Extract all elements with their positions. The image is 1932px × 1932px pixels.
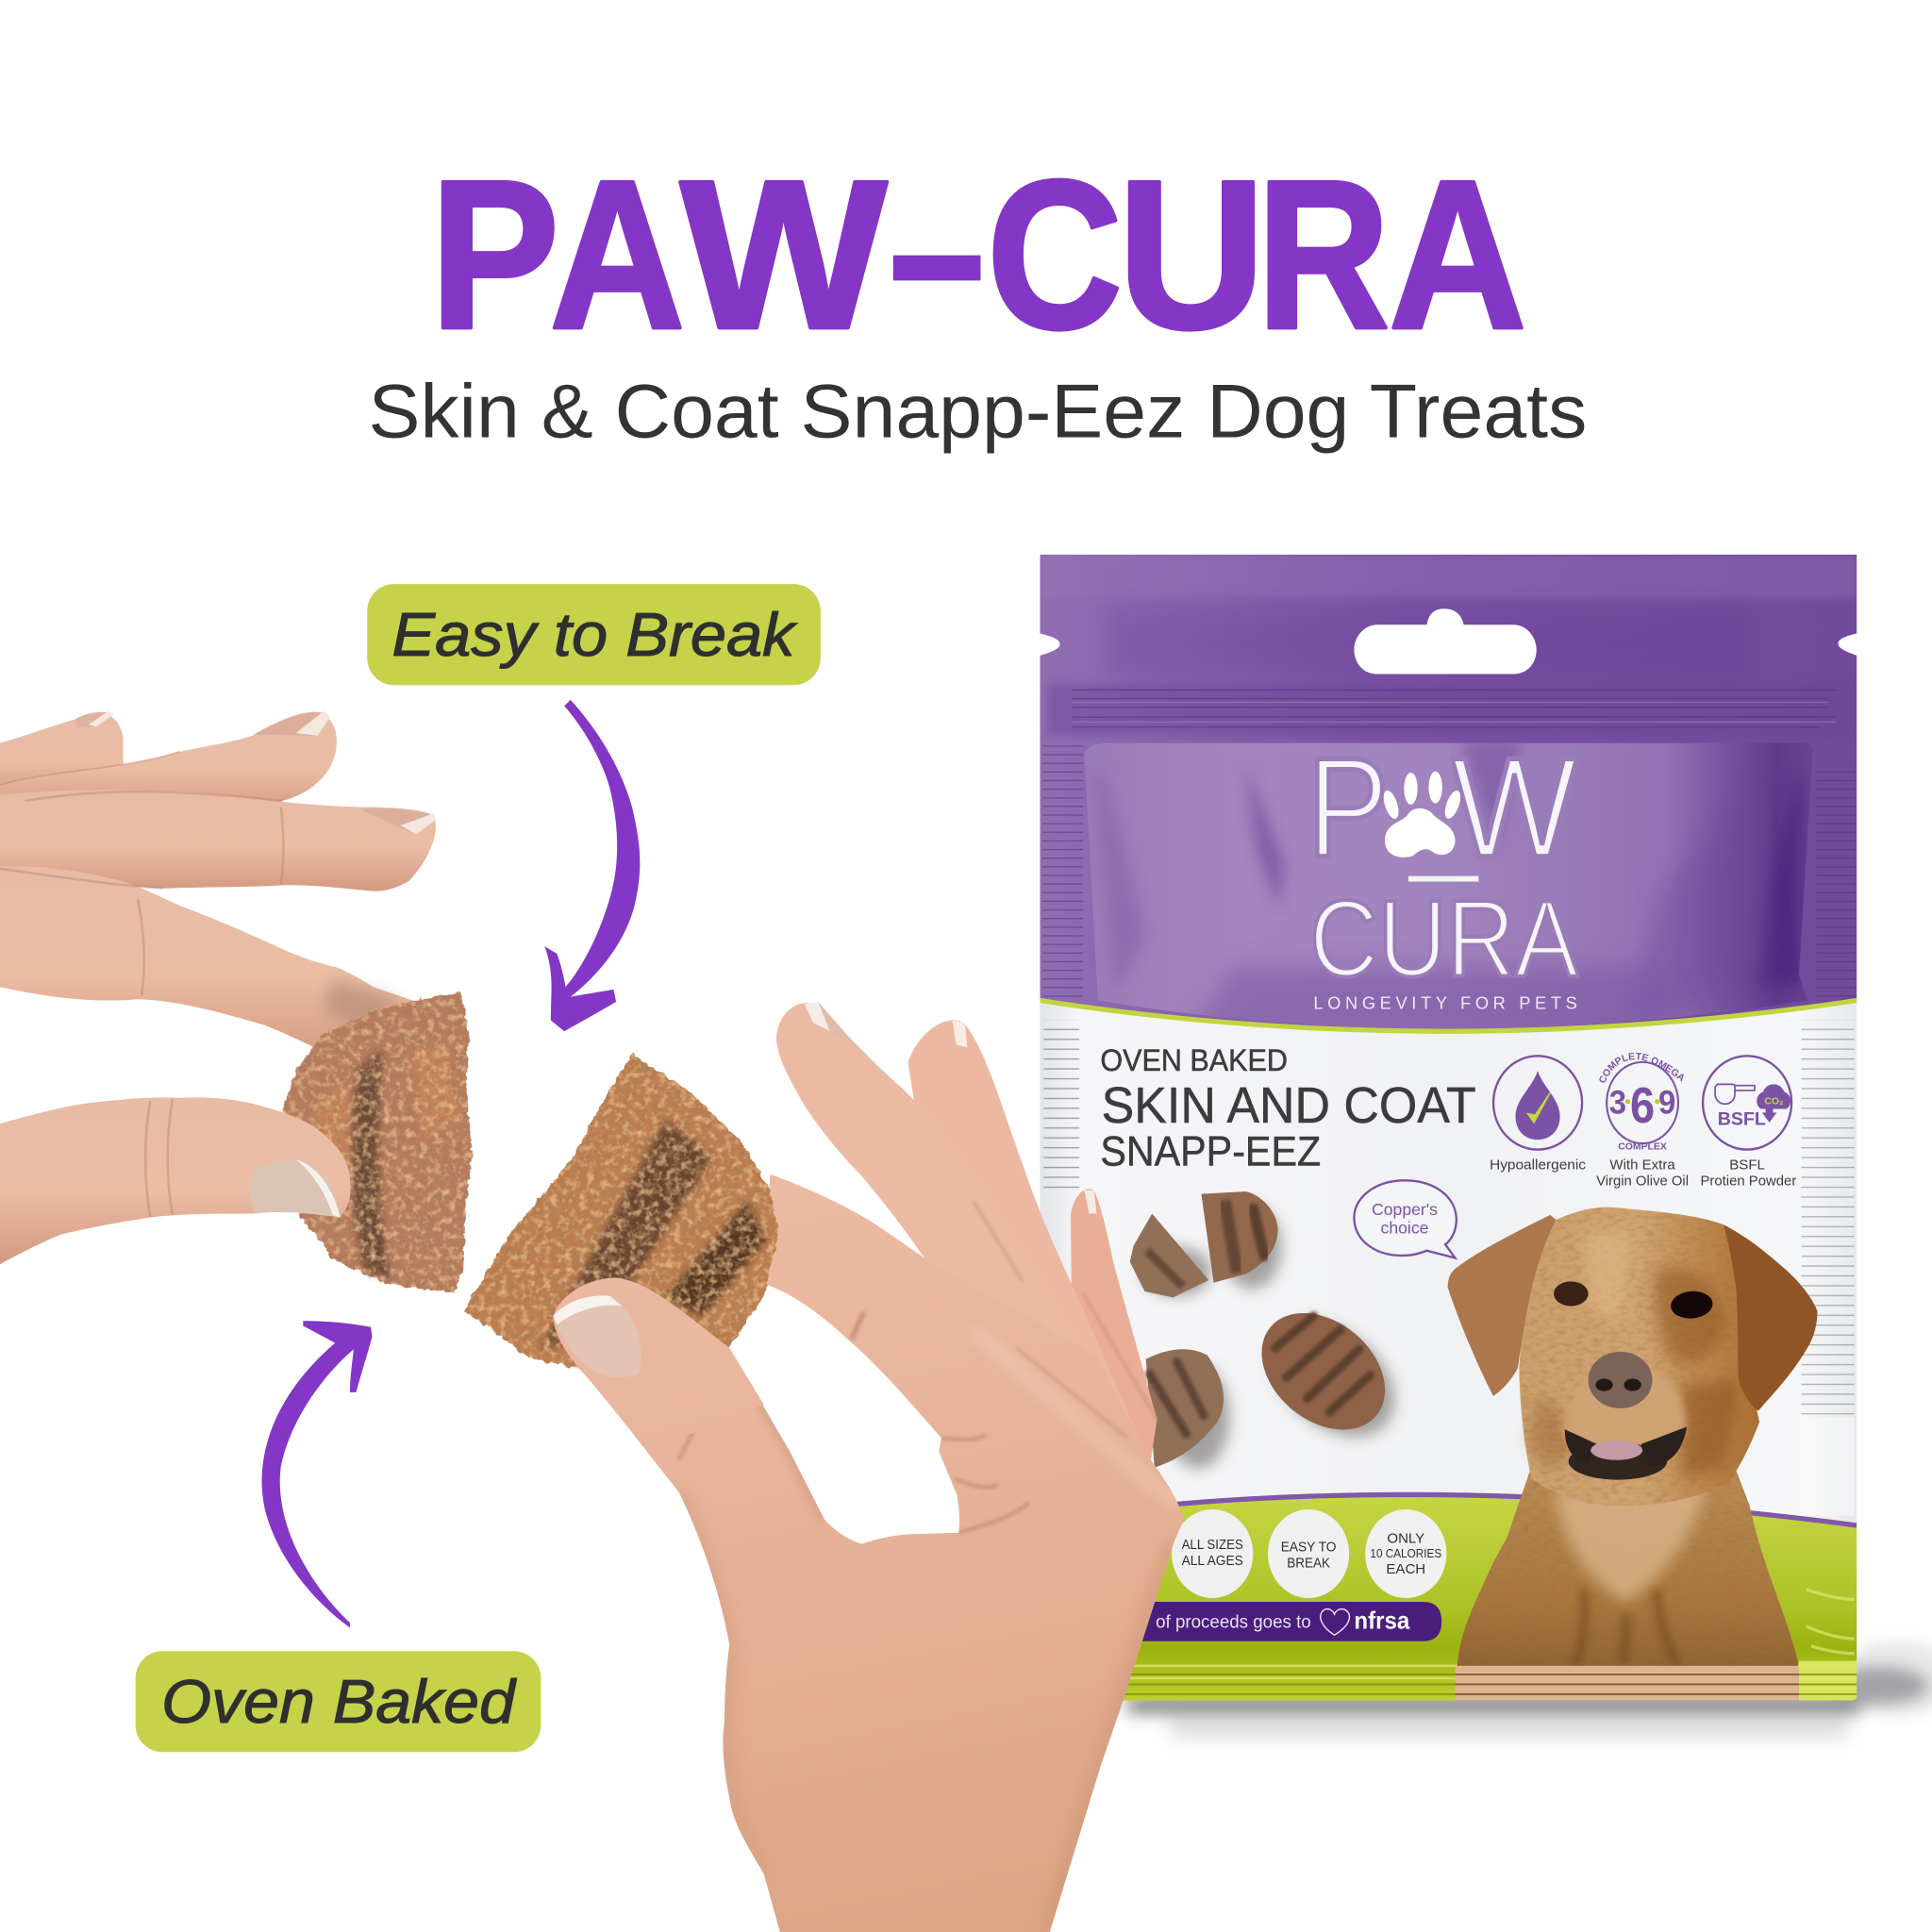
broken treat: left half [282,991,472,1292]
donation banner: nfrsa [1354,1607,1410,1635]
side foil creases [1042,745,1083,998]
icon: omega 3-6-9: COMPLETE OMEGA [1599,1053,1684,1083]
pouch shadow [1127,1641,1932,1740]
icon captions: Hypoallergenic [1490,1158,1586,1174]
product name: SKIN AND COAT [1102,1078,1476,1134]
finger nail tips [805,1002,1096,1214]
first finger [776,1003,1109,1454]
finger shading [0,752,283,995]
arrow: up to treat [262,1321,372,1627]
logo: PAW: W [1452,728,1577,887]
icon: omega 3-6-9: 3 [1609,1085,1626,1122]
dog nose [1589,1352,1653,1429]
logo: CURA: CURA [1309,878,1578,999]
title: - [880,131,994,368]
broken treat left [1130,1214,1208,1297]
left thumb [0,1097,351,1264]
benefit badges: ALL SIZES [1182,1537,1243,1553]
title: P [430,136,559,373]
dog eyes [1554,1281,1714,1320]
right hand [553,1002,1184,1932]
title: R [1257,136,1390,373]
groove [352,1047,390,1277]
icon: BSFL powder [1703,1056,1791,1150]
benefit badges: ALL AGES [1182,1553,1243,1569]
callout: Easy to Break: Easy to Break [391,600,798,669]
dog body [1456,1454,1799,1700]
whole treat [1239,1290,1407,1454]
back finger [1071,1189,1157,1460]
treat shadows [1142,1205,1416,1469]
index finger [0,866,413,1059]
zip seal [1047,684,1848,736]
title: A [1389,136,1526,373]
subtitle: Skin & Coat Snapp-Eez Dog Treats [369,370,1587,455]
icon: omega 3-6-9: 6 [1630,1078,1655,1134]
title: A [550,136,685,373]
dog head [1519,1208,1759,1507]
product name: SNAPP-EEZ [1100,1129,1321,1175]
benefit badges: ONLY [1387,1530,1424,1546]
middle finger [0,790,436,891]
title: C [987,136,1123,373]
treat body [463,1054,778,1374]
title [430,131,1526,373]
callout: Copper's choice: Copper's [1372,1200,1438,1219]
hang hole [1354,608,1537,674]
thumb nail [250,1160,340,1217]
icon: hypoallergenic drop [1493,1056,1582,1150]
icon: omega 3-6-9: COMPLEX [1618,1142,1667,1153]
benefit badges: 10 CALORIES [1370,1546,1441,1560]
icon: paw print [1381,772,1463,858]
white side creases [1043,1020,1079,1192]
thumb over treat [553,1277,764,1441]
dog face shading [1528,1232,1740,1478]
icon: omega 3-6-9: 9 [1658,1085,1675,1122]
callout: Oven Baked [136,1651,541,1752]
icon: omega 3-6-9 [1599,1053,1684,1153]
dog chest [1555,1485,1707,1602]
arrow: down to treat [544,700,640,1031]
benefit badges: EACH [1386,1561,1425,1577]
icon captions: With Extra [1609,1158,1675,1174]
donation banner [1109,1602,1441,1641]
product name: OVEN BAKED [1100,1043,1288,1077]
icon captions [1490,1158,1796,1189]
fingernail tips [76,711,436,834]
half treat [1146,1349,1224,1468]
finger boundaries [974,1201,1157,1438]
callout: Copper's choice: choice [1381,1218,1429,1237]
pinky finger [0,713,124,801]
treats on pouch [1130,1191,1416,1469]
dog illustration [1448,1208,1818,1700]
pouch body [1040,555,1857,1700]
title: U [1118,136,1265,373]
icon captions: Virgin Olive Oil [1596,1173,1689,1189]
icon: BSFL powder: CO₂ [1764,1096,1784,1107]
hand shading [679,1312,1178,1932]
dog muzzle [1562,1361,1686,1452]
icon captions: BSFL [1729,1158,1765,1174]
callout: Copper's choice [1354,1180,1457,1258]
dog mouth [1565,1426,1687,1480]
benefit badges: EASY TO [1281,1539,1336,1555]
dog tongue [1591,1441,1642,1460]
logo: PAW: P [1307,728,1389,887]
logo tagline: LONGEVITY FOR PETS [1313,993,1577,1013]
dog ear right [1724,1224,1818,1411]
broken treat right [1201,1191,1277,1283]
donation banner: of proceeds goes to [1156,1611,1311,1632]
benefit badges [1172,1509,1446,1598]
pouch front window [1084,743,1812,1029]
lime base band [1109,1494,1857,1700]
benefit badges: BREAK [1287,1555,1330,1571]
ring finger [0,712,337,813]
lime seam [1040,1001,1857,1031]
second finger [908,1020,1146,1454]
icon captions: Protien Powder [1700,1173,1796,1189]
callout: Easy to Break [367,584,821,685]
logo: PAW [1307,728,1577,887]
broken treat: right half [463,1054,778,1441]
product pouch [1012,555,1932,1745]
icon: BSFL powder: BSFL [1718,1108,1766,1129]
callout: Oven Baked: Oven Baked [161,1667,518,1736]
index and palm [553,1174,1184,1932]
product name [1100,1043,1476,1175]
dog ear left [1448,1215,1557,1396]
title: W [680,136,887,373]
dog base stripes [1456,1666,1799,1700]
left hand [0,711,436,1059]
